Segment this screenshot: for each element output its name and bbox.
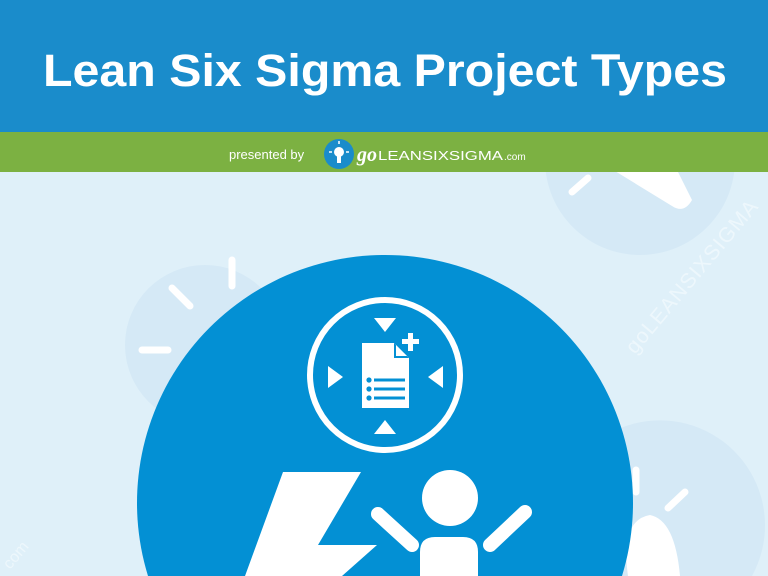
watermark text bottom left: com bbox=[0, 538, 32, 573]
presented by logo line: LEANSIXSIGMA bbox=[378, 148, 503, 163]
title: Lean Six Sigma Project Types bbox=[43, 45, 727, 96]
presented by logo line: go bbox=[356, 144, 377, 166]
icon: document in circle with arrows bbox=[310, 300, 460, 450]
presented by logo line bbox=[229, 139, 526, 169]
decorative faint circle: bottom right bulb bbox=[555, 420, 765, 576]
presented by logo line: presented by bbox=[229, 147, 305, 162]
icon: lightning bolt bbox=[245, 472, 377, 576]
icon: lightbulb logo bbox=[324, 139, 354, 169]
icon: person with raised arms bbox=[378, 470, 525, 576]
header band bbox=[0, 0, 768, 132]
presented-by band bbox=[0, 132, 768, 172]
big blue circle bbox=[137, 255, 633, 576]
presented by logo line: .com bbox=[504, 152, 526, 163]
decorative faint circle: left bulb bbox=[125, 260, 285, 425]
watermark text: goLEANSIXSIGMA bbox=[621, 195, 763, 358]
decorative faint circle: top right bulb bbox=[545, 65, 735, 255]
